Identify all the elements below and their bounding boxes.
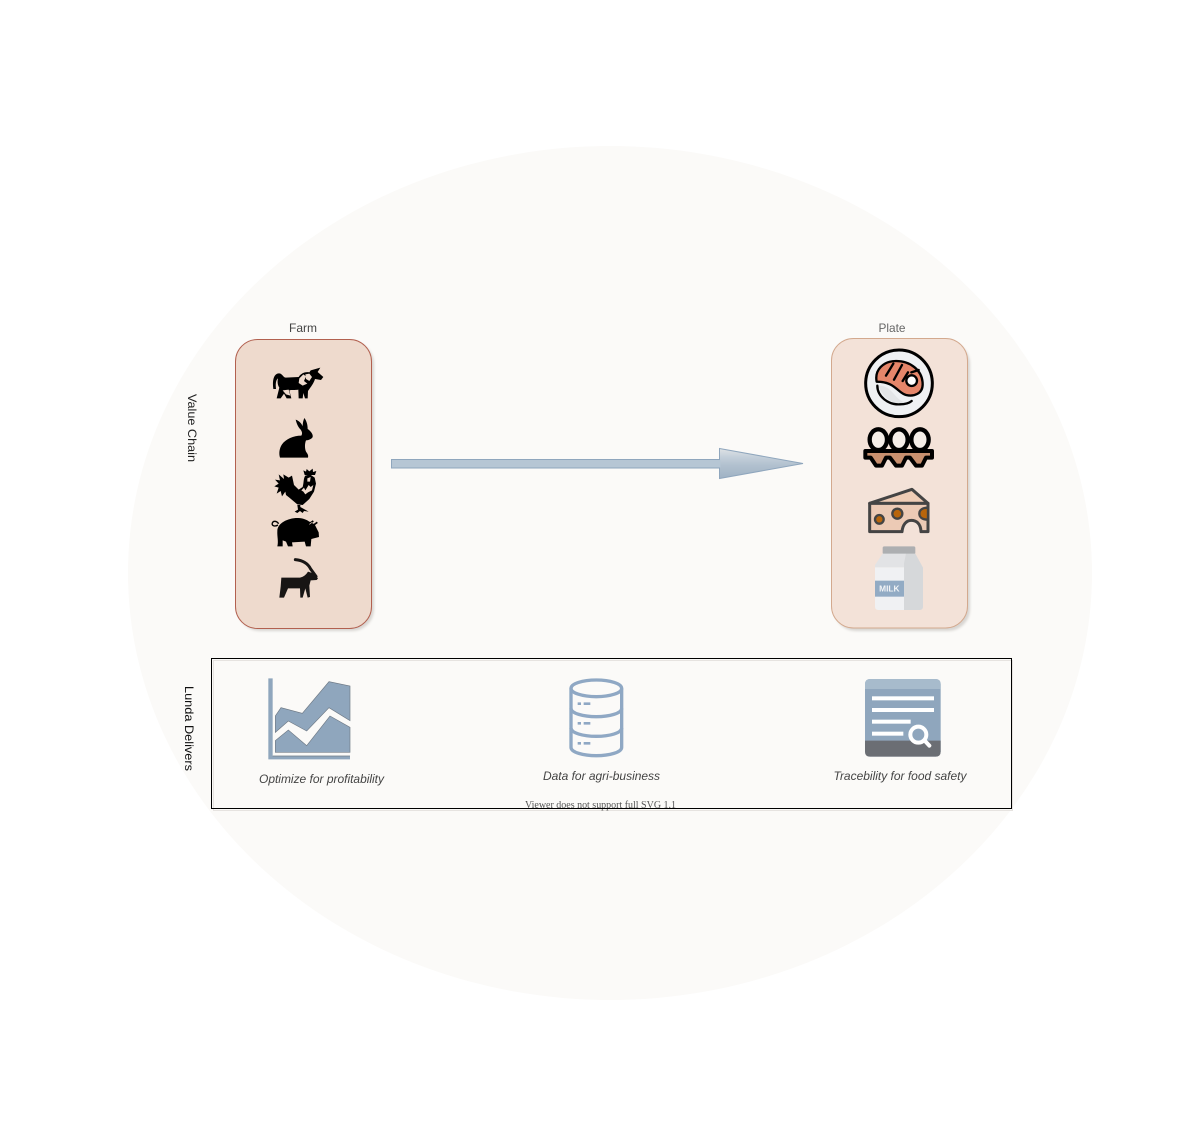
icon: rabbit bbox=[279, 418, 313, 458]
icon: pig bbox=[272, 518, 319, 546]
label: Lunda Delivers: Lunda Delivers bbox=[182, 686, 196, 771]
icon: egg tray bbox=[865, 429, 932, 466]
icon: cow bbox=[273, 368, 323, 398]
icon: document search bbox=[865, 679, 941, 757]
panel: Lunda Delivers bbox=[212, 658, 1012, 811]
label: Value Chain: Value Chain bbox=[185, 394, 199, 462]
icon: milk carton bbox=[875, 546, 923, 610]
caption: traceability: Tracebility for food safety bbox=[834, 769, 968, 783]
icon: rooster bbox=[274, 469, 316, 513]
panel: farm bbox=[236, 321, 374, 631]
icon: database bbox=[571, 680, 622, 756]
heading: Plate: Plate bbox=[878, 321, 906, 335]
panel: plate bbox=[832, 321, 970, 631]
icon: cheese bbox=[870, 489, 928, 532]
icon: area chart bbox=[268, 678, 350, 759]
icon: steak on plate bbox=[866, 350, 932, 417]
text: viewer notice: Viewer does not support full SVG 1.1 bbox=[525, 800, 676, 811]
farm animal icons bbox=[272, 368, 323, 598]
heading: Farm: Farm bbox=[289, 321, 317, 335]
icon: milk carton: MILK bbox=[879, 583, 900, 593]
caption: profitability: Optimize for profitability bbox=[259, 772, 385, 786]
plate food icons bbox=[865, 350, 932, 610]
icon: goat bbox=[279, 560, 318, 598]
arrow: farm to plate bbox=[392, 448, 803, 478]
background ellipse bbox=[128, 146, 1092, 1000]
caption: agri-business: Data for agri-business bbox=[543, 769, 660, 783]
